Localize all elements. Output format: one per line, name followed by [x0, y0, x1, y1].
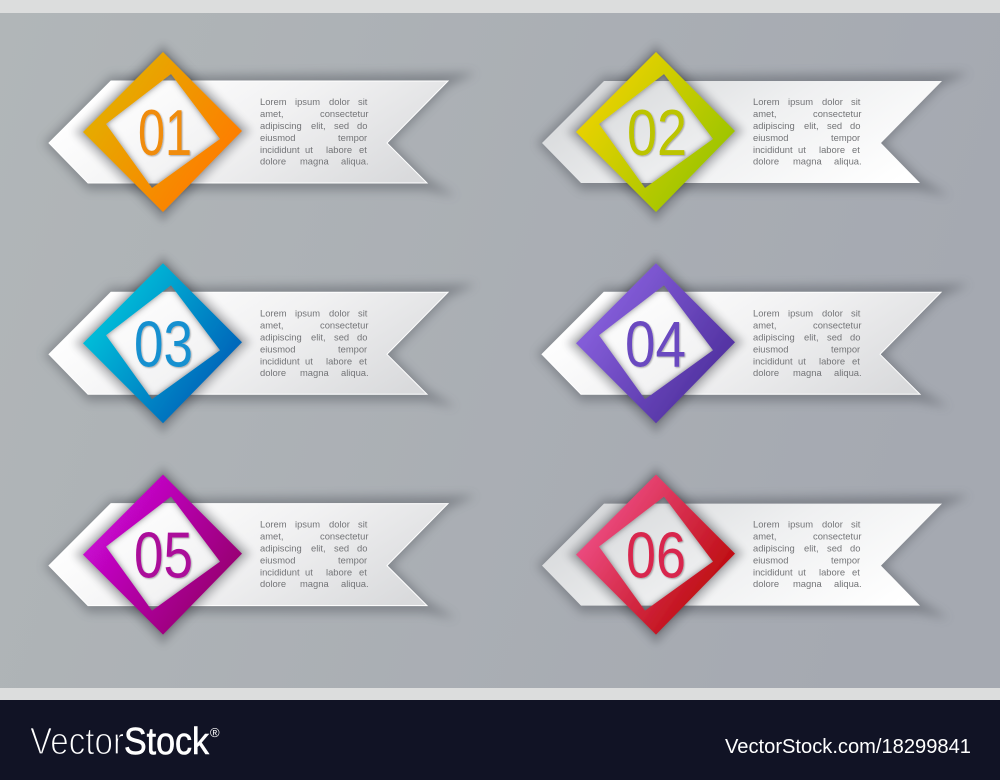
number: 02: [627, 96, 687, 169]
footer bar: [0, 700, 1000, 780]
description: ut: [305, 567, 313, 578]
description: amet,: [753, 319, 776, 330]
description: adipiscing: [753, 120, 795, 131]
diamond frame: [83, 52, 242, 212]
description: dolore: [753, 156, 779, 166]
description: amet,: [260, 531, 283, 542]
description: dolor: [329, 307, 350, 318]
description: dolor: [822, 519, 843, 530]
ribbon shadow: [537, 496, 969, 619]
description: aliqua.: [834, 578, 862, 589]
description: incididunt: [260, 144, 300, 155]
description: dolore: [260, 367, 286, 378]
description: adipiscing: [260, 543, 302, 554]
description: do: [850, 120, 860, 131]
logo: VectorStock: ®: [210, 725, 220, 740]
description: sed: [827, 120, 842, 131]
description: sed: [334, 331, 349, 342]
ribbon: [49, 292, 448, 394]
description: ipsum: [295, 519, 320, 530]
description: amet,: [753, 108, 776, 119]
description: aliqua.: [834, 156, 862, 166]
description: magna: [793, 578, 822, 589]
description: elit,: [804, 120, 819, 131]
description: elit,: [311, 120, 326, 131]
number: 04: [625, 307, 686, 380]
description: ut: [798, 144, 806, 155]
description: consectetur: [813, 108, 861, 119]
source URL: VectorStock.com/18299841: [725, 736, 971, 758]
description: et: [852, 567, 860, 578]
description: [260, 519, 369, 589]
description: adipiscing: [753, 331, 795, 342]
ribbon: [49, 504, 448, 606]
diamond shadow: [567, 44, 744, 222]
ribbon: [49, 81, 448, 183]
description: elit,: [804, 331, 819, 342]
diamond shadow: [74, 255, 251, 433]
description: dolor: [329, 519, 350, 530]
description: consectetur: [813, 531, 861, 542]
diamond frame: [83, 475, 242, 635]
description: magna: [300, 367, 329, 378]
description: [753, 519, 862, 589]
bottom light band: [0, 688, 1000, 700]
description: magna: [793, 156, 822, 166]
ribbon shadow: [44, 496, 476, 619]
description: dolore: [260, 578, 286, 589]
description: eiusmod: [753, 555, 788, 566]
description: incididunt: [260, 567, 300, 578]
ribbon: [542, 504, 942, 606]
description: incididunt: [753, 355, 793, 366]
ribbon shadow: [44, 73, 476, 196]
description: sit: [358, 96, 368, 107]
description: sit: [851, 519, 861, 530]
number: 06: [626, 519, 686, 592]
description: amet,: [260, 108, 283, 119]
description: sed: [827, 543, 842, 554]
description: dolore: [753, 367, 779, 378]
description: eiusmod: [260, 132, 295, 143]
description: do: [850, 543, 860, 554]
description: [753, 307, 862, 378]
description: et: [852, 355, 860, 366]
description: tempor: [338, 132, 367, 143]
description: eiusmod: [260, 343, 295, 354]
diamond shadow: [74, 44, 251, 222]
diamond frame: [576, 52, 735, 212]
description: labore: [819, 144, 845, 155]
top light band: [0, 0, 1000, 13]
ribbon: [542, 292, 941, 394]
description: do: [357, 543, 367, 554]
description: consectetur: [320, 108, 368, 119]
description: consectetur: [813, 319, 861, 330]
description: magna: [793, 367, 822, 378]
description: sed: [334, 543, 349, 554]
description: Lorem: [753, 307, 780, 318]
ribbon: [542, 81, 942, 183]
description: do: [357, 331, 367, 342]
description: dolore: [260, 156, 286, 166]
description: magna: [300, 156, 329, 166]
description: elit,: [311, 331, 326, 342]
description: [260, 307, 369, 378]
description: amet,: [260, 319, 283, 330]
description: aliqua.: [341, 578, 369, 589]
description: ipsum: [788, 519, 813, 530]
description: Lorem: [260, 307, 287, 318]
description: eiusmod: [260, 555, 295, 566]
description: dolor: [822, 307, 843, 318]
description: dolore: [753, 578, 779, 589]
diamond frame: [576, 263, 735, 423]
description: ut: [798, 355, 806, 366]
panel: item 05: [44, 467, 476, 645]
description: sit: [851, 96, 861, 107]
description: consectetur: [320, 319, 368, 330]
diamond frame: [83, 263, 242, 423]
description: labore: [326, 567, 352, 578]
diamond frame: [576, 475, 735, 635]
description: tempor: [338, 555, 367, 566]
description: amet,: [753, 531, 776, 542]
description: Lorem: [753, 519, 780, 530]
description: sed: [334, 120, 349, 131]
description: tempor: [831, 343, 860, 354]
logo: VectorStock: Vector: [30, 721, 124, 763]
description: magna: [300, 578, 329, 589]
description: do: [357, 120, 367, 131]
description: dolor: [822, 96, 843, 107]
description: adipiscing: [753, 543, 795, 554]
description: ipsum: [295, 96, 320, 107]
number: 03: [134, 307, 193, 380]
description: adipiscing: [260, 331, 302, 342]
panel: item 02: [537, 44, 969, 222]
logo: VectorStock: Stock: [124, 721, 210, 763]
description: ut: [305, 355, 313, 366]
description: et: [359, 567, 367, 578]
description: eiusmod: [753, 343, 788, 354]
ribbon shadow: [537, 284, 969, 407]
description: Lorem: [260, 519, 287, 530]
description: et: [359, 355, 367, 366]
diamond shadow: [567, 255, 744, 433]
ribbon shadow: [537, 73, 969, 196]
description: sit: [851, 307, 861, 318]
number: 05: [134, 519, 193, 592]
ribbon shadow: [44, 284, 476, 407]
description: tempor: [831, 132, 860, 143]
description: tempor: [338, 343, 367, 354]
diamond shadow: [74, 467, 251, 645]
description: Lorem: [260, 96, 287, 107]
description: labore: [326, 144, 352, 155]
description: do: [850, 331, 860, 342]
description: ut: [305, 144, 313, 155]
description: tempor: [831, 555, 860, 566]
description: elit,: [804, 543, 819, 554]
description: aliqua.: [834, 367, 862, 378]
panel: item 03: [44, 255, 476, 433]
description: et: [359, 144, 367, 155]
description: elit,: [311, 543, 326, 554]
description: incididunt: [753, 144, 793, 155]
description: sit: [358, 519, 368, 530]
description: consectetur: [320, 531, 368, 542]
description: Lorem: [753, 96, 780, 107]
description: incididunt: [753, 567, 793, 578]
description: aliqua.: [341, 156, 369, 166]
description: labore: [819, 355, 845, 366]
panel: item 06: [537, 467, 969, 645]
description: [260, 96, 369, 166]
diamond shadow: [567, 467, 744, 645]
panel: item 01: [44, 44, 476, 222]
description: sed: [827, 331, 842, 342]
description: labore: [326, 355, 352, 366]
description: ipsum: [788, 96, 813, 107]
description: ipsum: [295, 307, 320, 318]
description: ipsum: [788, 307, 813, 318]
description: ut: [798, 567, 806, 578]
description: adipiscing: [260, 120, 302, 131]
description: aliqua.: [341, 367, 369, 378]
description: et: [852, 144, 860, 155]
description: eiusmod: [753, 132, 788, 143]
description: dolor: [329, 96, 350, 107]
number: 01: [138, 96, 192, 169]
logo: VectorStock: [30, 721, 220, 763]
panel: item 04: [537, 255, 969, 433]
description: labore: [819, 567, 845, 578]
description: [753, 96, 862, 166]
description: sit: [358, 307, 368, 318]
description: incididunt: [260, 355, 300, 366]
